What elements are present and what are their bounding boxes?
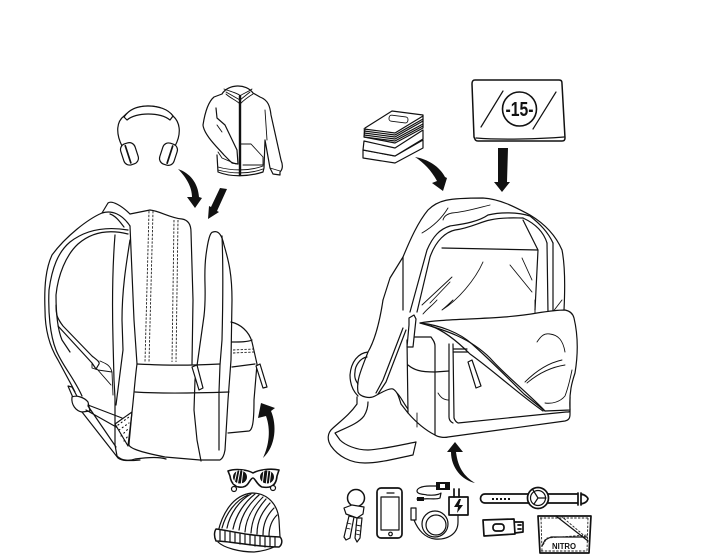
body bbox=[407, 340, 570, 437]
pocket flap bbox=[420, 310, 577, 411]
illustration: backpack side view bbox=[45, 202, 267, 461]
creases bbox=[422, 205, 562, 314]
side wall strips bbox=[113, 235, 117, 456]
arrow: laptop into backpack bbox=[494, 148, 510, 192]
icon: laptop 15 inch bbox=[472, 80, 565, 141]
carrying strap bbox=[358, 300, 408, 413]
front pocket bbox=[228, 322, 257, 433]
icon: headphones bbox=[118, 106, 179, 167]
icon: smartphone bbox=[377, 488, 402, 538]
arrow: books into backpack bbox=[415, 157, 447, 191]
label: NITRO: NITRO bbox=[552, 542, 576, 551]
arrow: small items into front pocket bbox=[447, 442, 475, 483]
back hood outline bbox=[383, 198, 565, 310]
icon: stack of books bbox=[363, 111, 423, 163]
dotted mesh pocket bbox=[115, 412, 132, 446]
pocket zipper pull bbox=[468, 360, 481, 388]
pocket zipper pull bbox=[256, 364, 267, 388]
icon: hoodie jacket bbox=[203, 86, 282, 176]
icon: charger and cable bbox=[411, 482, 468, 539]
icon: NITRO wallet bbox=[538, 516, 591, 553]
arrow: accessories into side pocket bbox=[258, 403, 275, 458]
main zipper pull bbox=[192, 365, 203, 390]
main zipper pull bbox=[407, 315, 416, 347]
front panel bbox=[204, 232, 232, 450]
front pocket bbox=[449, 344, 570, 423]
main body bbox=[130, 210, 193, 364]
buckle and lower strap bbox=[68, 386, 78, 400]
icon: USB drive bbox=[483, 519, 523, 536]
top handle bbox=[102, 202, 130, 227]
arrow: headphones into backpack bbox=[178, 169, 202, 208]
icon: sunglasses bbox=[228, 469, 279, 492]
shoulder straps bbox=[45, 213, 102, 392]
arrow: hoodie into backpack bbox=[208, 188, 227, 219]
icon: keys bbox=[344, 490, 364, 542]
icon: beanie hat bbox=[214, 493, 282, 552]
illustration: backpack front view bbox=[328, 198, 577, 463]
icon: wristwatch bbox=[480, 488, 588, 508]
label: 15: -15- bbox=[506, 99, 534, 121]
